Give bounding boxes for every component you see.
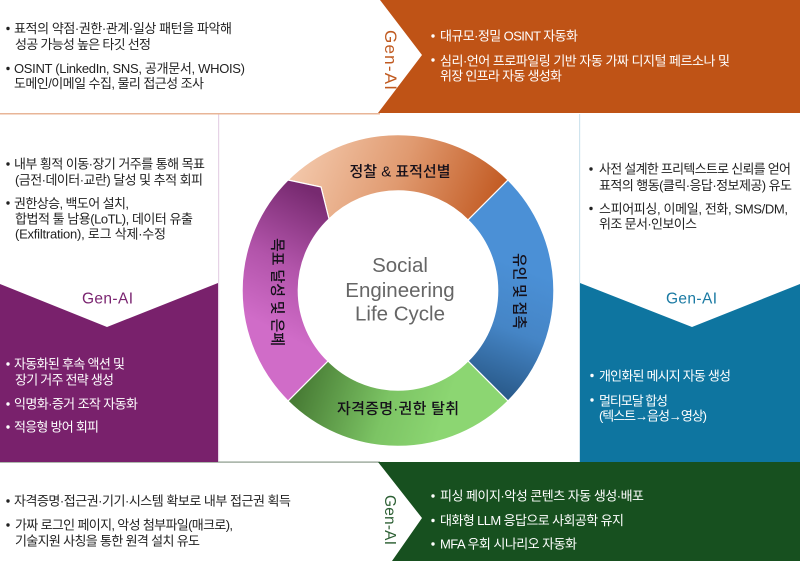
panel: objectives, Gen-AI [0, 283, 218, 462]
text: persistence strategy: 장기 거주 전략 생성 [15, 372, 114, 388]
panel: credential theft, Gen-AI [378, 462, 800, 561]
text: multimodal detail: (텍스트→음성→영상) [599, 408, 707, 424]
panel: objectives, human tasks [6, 156, 205, 242]
center title: Engineering [345, 279, 455, 302]
text: multimodal synthesis: 멀티모달 합성 [599, 394, 668, 408]
panel: reconnaissance, Gen-AI [378, 0, 800, 113]
text: pretexting: 사전 설계한 프리텍스트로 신뢰를 얻어 [599, 162, 791, 176]
panel: lure and contact, human tasks [589, 162, 792, 232]
text: lateral movement: 내부 횡적 이동·장기 거주를 통해 목표 [14, 156, 205, 172]
center title: Social [372, 254, 428, 277]
segment: objectives and concealment: 목표 달성 및 은폐 [268, 238, 286, 346]
label: Gen-AI top: Gen-AI [381, 30, 400, 90]
text: fake support: 기술지원 사칭을 통한 원격 설치 유도 [15, 534, 200, 548]
text: privilege escalation: 권한상승, 백도어 설치, [14, 196, 129, 211]
text: exfiltration: (Exfiltration), 로그 삭제·수정 [15, 226, 166, 242]
text: lateral movement line 2: (금전·데이터·교란) 달성 및 추적 회피 [15, 172, 203, 188]
text: persona generation: 심리·언어 프로파일링 기반 자동 가짜 디지털 페르소나 및 [440, 54, 730, 68]
segment: lure and contact: 유인 및 접촉 [510, 253, 528, 329]
text: credentials: 자격증명·접근권·기기·시스템 확보로 내부 접근권 획득 [14, 494, 291, 508]
panel: credential theft, human tasks [6, 494, 291, 548]
text: forged documents: 위조 문서·인보이스 [599, 216, 697, 232]
panel: reconnaissance, human tasks [6, 21, 245, 91]
text: fake login: 가짜 로그인 페이지, 악성 첨부파일(매크로), [15, 518, 233, 532]
text: anonymization: 익명화·증거 조작 자동화 [14, 396, 138, 412]
segment: credential theft: 자격증명·권한 탈취 [337, 400, 459, 418]
panel: lure and contact, Gen-AI [580, 283, 800, 462]
chart: life cycle ring [242, 135, 554, 446]
text: adaptive evasion: 적응형 방어 회피 [14, 420, 99, 434]
segment: reconnaissance [288, 135, 508, 220]
segment: lure and contact [468, 180, 554, 401]
text: MFA bypass: MFA 우회 시나리오 자동화 [440, 536, 577, 552]
text: phishing pages: 피싱 페이지·악성 콘텐츠 자동 생성·배포 [440, 488, 644, 504]
center title [345, 254, 455, 326]
label: Gen-AI right: Gen-AI [666, 290, 717, 308]
text: channels: 스피어피싱, 이메일, 전화, SMS/DM, [599, 202, 788, 216]
text: automated follow-up: 자동화된 후속 액션 및 [14, 356, 125, 372]
text: pretexting line 2: 표적의 행동(클릭·응답·정보제공) 유도 [599, 178, 792, 193]
text: target selection line 2: 성공 가능성 높은 타깃 선정 [15, 37, 151, 52]
text: OSINT sources: OSINT (LinkedIn, SNS, 공개문서, WHOIS) [14, 61, 245, 76]
label: Gen-AI left: Gen-AI [82, 290, 133, 308]
text: large-scale OSINT: 대규모·정밀 OSINT 자동화 [440, 28, 578, 44]
text: OSINT sources line 2: 도메인/이메일 수집, 물리 접근성 조사 [14, 76, 204, 91]
segment: objectives and concealment [242, 180, 329, 401]
segment: credential theft [288, 361, 508, 446]
text: LLM responses: 대화형 LLM 응답으로 사회공학 유지 [440, 513, 624, 528]
text: persona generation line 2: 위장 인프라 자동 생성화 [440, 68, 562, 84]
center title: Life Cycle [355, 302, 445, 326]
text: target selection: 표적의 약점·권한·관계·일상 패턴을 파악해 [14, 21, 232, 36]
segment: reconnaissance: 정찰 & 표적선별 [350, 164, 450, 180]
label: Gen-AI bottom: Gen-AI [381, 495, 398, 545]
text: personalized messages: 개인화된 메시지 자동 생성 [599, 368, 731, 384]
text: LoTL: 합법적 툴 남용(LoTL), 데이터 유출 [15, 212, 193, 226]
